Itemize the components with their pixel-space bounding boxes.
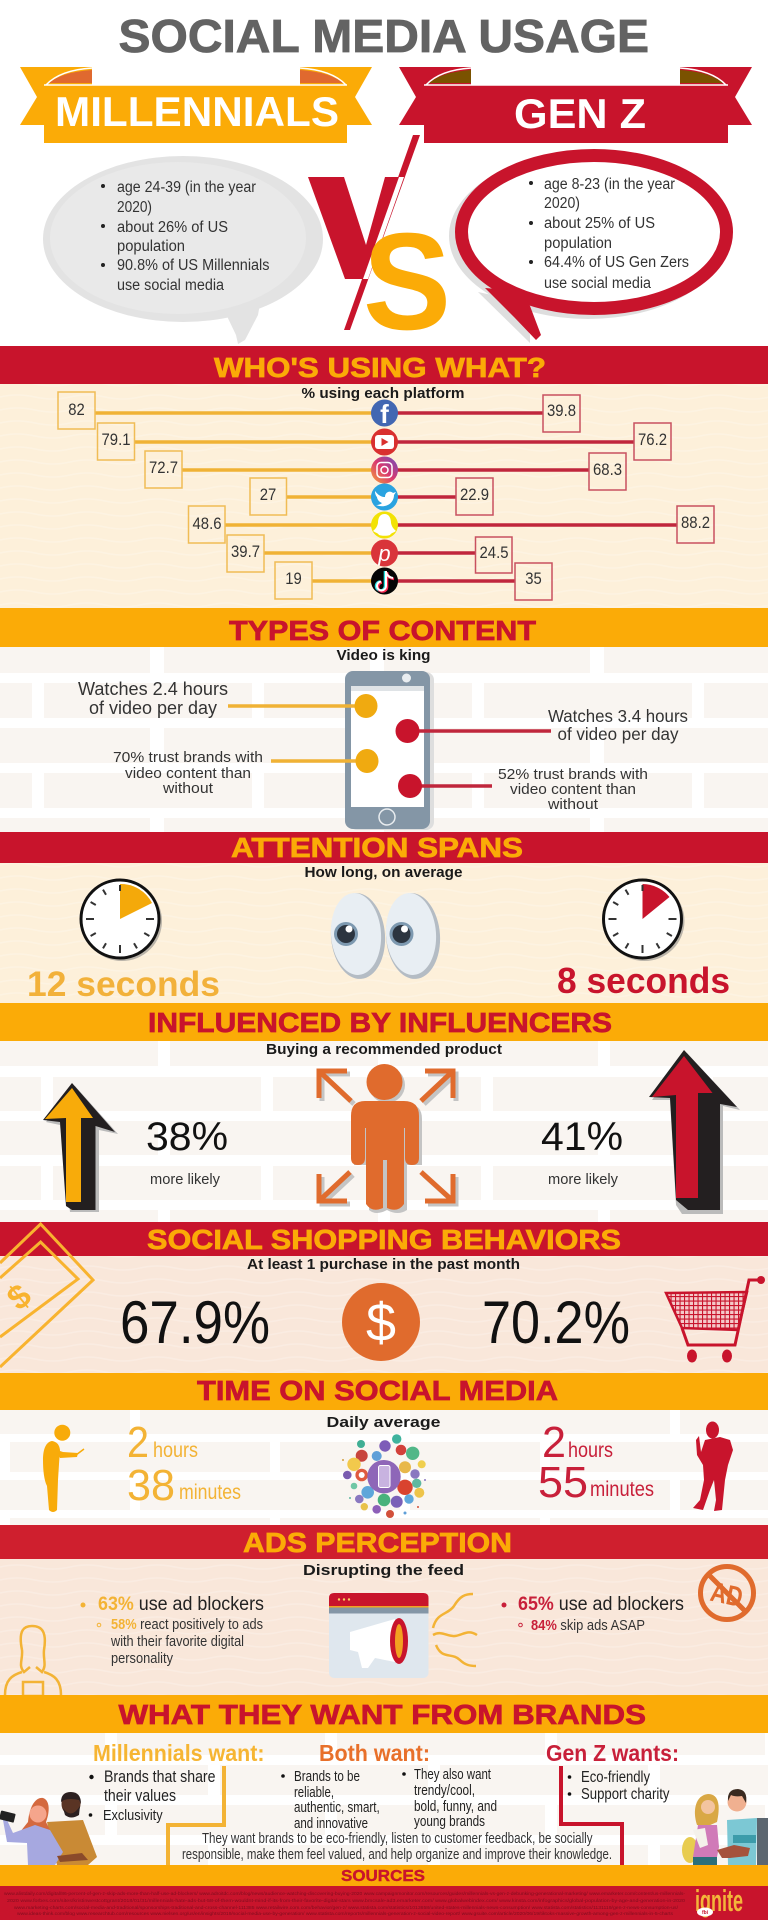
panel: social shopping behaviors: SOCIAL SHOPPING BEHAVIORS — [147, 1224, 621, 1255]
panel: influenced by influencers: Buying a recommended product — [266, 1042, 502, 1058]
Millennials ad facts: 58% react positively to ads — [111, 1617, 263, 1633]
Gen Z wants column: Gen Z wants: — [546, 1740, 679, 1766]
Millennials ad facts: with their favorite digital — [110, 1634, 244, 1650]
Millennials values — [58, 392, 312, 599]
callout: Millennials trust — [113, 749, 378, 797]
values text: 22.9 — [460, 486, 489, 504]
speech bubble: Millennials facts: use social media — [117, 277, 224, 294]
callout: Millennials video hours: Watches 2.4 hours — [78, 679, 228, 699]
logo: ignite: fbi — [702, 1910, 709, 1916]
icon: snapchat — [371, 512, 398, 538]
source links — [4, 1891, 686, 1916]
values text: 48.6 — [192, 515, 222, 533]
panel: who's using what: WHO'S USING WHAT? — [214, 352, 546, 383]
stat: 38% more likely: 38% — [146, 1115, 228, 1159]
icon: money bill — [0, 1224, 93, 1367]
source links: www.ideas-think.com/blog www.researchtub.com/resources www.nielsen.org/us/en/insights/2019/social-media-use-by-generation/ www.statista.com/reports/millennials-generation-z-social-video-report/ www.gsuite.com/article/2020/06/19/tiktoks-massive-growth-among-gen-z-millennials-in-5-charts — [17, 1911, 674, 1916]
values text: 88.2 — [681, 514, 710, 532]
values text — [68, 401, 710, 588]
values text: 79.1 — [102, 431, 130, 449]
callout: Gen Z video hours: of video per day — [558, 724, 679, 744]
stat: 8 seconds: 8 seconds — [557, 960, 730, 1001]
panel: what they want from brands — [0, 1695, 768, 1865]
panel: types of content — [0, 608, 768, 832]
icon: social media cluster — [342, 1434, 426, 1518]
panel: ads perception: ADS PERCEPTION — [243, 1527, 512, 1558]
values text: 72.7 — [149, 459, 178, 477]
speech bubble: Millennials facts: 2020) — [117, 199, 152, 216]
stat: Millennials 2 hours 38 minutes: 38 — [127, 1461, 175, 1510]
Millennials ad facts: personality — [111, 1651, 174, 1667]
panel: types of content: TYPES OF CONTENT — [229, 615, 536, 646]
Gen Z wants column — [546, 1740, 679, 1803]
stat: Gen Z 2 hours 55 minutes: 2 — [542, 1418, 566, 1467]
panel: attention spans: ATTENTION SPANS — [231, 832, 523, 863]
speech bubble: Millennials facts: population — [117, 238, 185, 255]
Both want column: bold, funny, and — [414, 1799, 497, 1815]
panel: types of content: Video is king — [336, 648, 430, 664]
VS emblem: S — [363, 205, 451, 359]
speech bubble: Millennials facts — [43, 156, 323, 344]
icon: pinterest: p — [377, 541, 391, 566]
icon: Millennial on phone — [43, 1425, 84, 1512]
speech bubble: Gen Z facts: 64.4% of US Gen Zers — [544, 254, 689, 271]
panel: social shopping behaviors: At least 1 purchase in the past month — [247, 1257, 520, 1273]
divider: Gen Z bracket — [561, 1766, 622, 1865]
Gen Z ad facts — [502, 1594, 684, 1634]
panel: time on social media: Daily average — [326, 1415, 440, 1431]
speech bubble: Gen Z facts: use social media — [544, 275, 651, 292]
icon: ad window with megaphone — [329, 1593, 477, 1678]
icon: dollar coin — [342, 1283, 420, 1361]
icon: no ads: AD — [708, 1576, 746, 1613]
Gen Z ad facts: 84% skip ads ASAP — [531, 1618, 645, 1634]
source links: www.marketing-charts.com/social-media-and-traditional/sponsorships-traditional-and-cross-channel-111385 www.retailwire.com.com/behavior/gen-z/ www.statista.com/statistics/1013658/united-states-millennials-news-consumption/ www.statista.com/statistics/1131119/gen-z-news-consumption-us/ — [14, 1905, 679, 1910]
stat: Gen Z 2 hours 55 minutes: hours — [568, 1439, 613, 1462]
Both want column: young brands — [414, 1814, 485, 1830]
callout: Gen Z video hours: Watches 3.4 hours — [548, 706, 688, 726]
stat: Gen Z 2 hours 55 minutes: 55 — [538, 1458, 588, 1507]
Both want column: They also want — [414, 1767, 491, 1783]
icon: twitter — [371, 484, 398, 510]
title: SOCIAL MEDIA USAGE — [118, 10, 649, 62]
speech bubble: Gen Z facts: age 8-23 (in the year — [544, 176, 675, 193]
summary text: They want brands to be eco-friendly, listen to customer feedback, be socially — [202, 1831, 593, 1847]
stat: 70.2%: 70.2% — [482, 1289, 630, 1356]
speech bubble: Millennials facts: 90.8% of US Millennials — [117, 257, 270, 274]
callout: Gen Z trust: without — [547, 796, 599, 813]
Both want column: Brands to be — [294, 1769, 360, 1785]
icon: Gen Z up arrow — [649, 1050, 740, 1214]
stat: Millennials 2 hours 38 minutes — [127, 1418, 241, 1510]
callout: Millennials video hours: of video per day — [89, 698, 217, 718]
panel: ads perception: Disrupting the feed — [303, 1563, 464, 1579]
stat: Millennials 2 hours 38 minutes: 2 — [127, 1418, 149, 1467]
callout: Gen Z trust: 52% trust brands with — [498, 766, 648, 783]
banner: Millennials: MILLENNIALS — [55, 88, 339, 135]
icon: phone — [345, 671, 434, 830]
source links: 2020 www.forbes.com/sites/kristinwestcottgrant/2018/01/31/millennials-hate-ads-but-58-of-them-wouldnt-mind-if-its-from-their-favorite-digital-stars www.bmcsale-ad3.emarketer.com/ www.globalwebindex.com/ www.kinsta.com/infographics/global-population-by-age-and-generation-in-2020 — [7, 1898, 686, 1903]
icon: Millennials clock — [81, 880, 162, 961]
Both want column: reliable, — [294, 1785, 334, 1801]
speech bubble: Gen Z facts: about 25% of US — [544, 215, 655, 232]
callout: Gen Z video hours — [396, 706, 688, 744]
icon: pinterest — [371, 540, 398, 566]
summary text: responsible, make them feel valued, and help organize and improve their knowledge. — [182, 1847, 612, 1863]
Gen Z wants column: Eco-friendly — [581, 1769, 650, 1786]
values text: 24.5 — [480, 544, 508, 562]
icon: eyes — [328, 891, 443, 981]
VS emblem — [308, 135, 451, 359]
callout: Millennials trust: video content than — [125, 765, 251, 782]
panel: ads perception — [0, 1525, 768, 1696]
panel: attention spans — [0, 832, 768, 1004]
panel: who's using what: % using each platform — [302, 386, 464, 402]
icon: woman outline — [5, 1626, 61, 1696]
Both want column: and innovative — [294, 1816, 368, 1832]
panel: who's using what — [0, 346, 768, 608]
values text: 39.7 — [231, 543, 260, 561]
panel: influenced by influencers — [0, 1003, 768, 1222]
stat: Gen Z 2 hours 55 minutes — [538, 1418, 654, 1507]
panel: influenced by influencers: INFLUENCED BY INFLUENCERS — [148, 1007, 612, 1038]
icon: no ads — [700, 1566, 754, 1620]
stat: 67.9%: 67.9% — [120, 1289, 270, 1356]
callout: Millennials trust: 70% trust brands with — [113, 749, 263, 766]
stat: 12 seconds: 12 seconds — [27, 965, 220, 1004]
values text: 68.3 — [593, 461, 622, 479]
Both want column: Both want: — [319, 1740, 430, 1766]
values text: 82 — [68, 401, 85, 419]
illustration: Gen Z students — [682, 1789, 768, 1865]
Both want column: authentic, smart, — [294, 1800, 380, 1816]
panel: sources: SOURCES — [341, 1868, 425, 1885]
panel: what they want from brands: WHAT THEY WANT FROM BRANDS — [118, 1699, 646, 1730]
logo: ignite — [695, 1883, 743, 1918]
icon: shopping cart — [666, 1276, 765, 1362]
icon: youtube — [371, 428, 398, 456]
icon: instagram — [371, 456, 398, 484]
stat: 38% more likely: more likely — [150, 1171, 220, 1188]
speech bubble: Gen Z facts: population — [544, 235, 612, 252]
Millennials want column: their values — [104, 1787, 176, 1805]
Gen Z wants column: Support charity — [581, 1786, 670, 1803]
panel: sources — [0, 1865, 768, 1920]
Millennials want column: Brands that share — [104, 1768, 216, 1786]
speech bubble: Millennials facts: about 26% of US — [117, 219, 228, 236]
Millennials want column — [89, 1740, 264, 1824]
callout: Gen Z trust — [398, 766, 648, 813]
banner: Millennials — [20, 67, 372, 143]
banner: Gen Z — [399, 67, 752, 143]
panel: attention spans: How long, on average — [304, 865, 462, 881]
Millennials want column: Millennials want: — [93, 1740, 264, 1766]
icon: influencer figure — [319, 1064, 456, 1213]
stat: 41% more likely: more likely — [548, 1171, 618, 1188]
Gen Z ad facts: 65% use ad blockers — [518, 1594, 684, 1615]
icon: facebook: f — [380, 399, 389, 429]
icon: Gen Z on phone — [693, 1422, 733, 1511]
stat: Millennials 2 hours 38 minutes: minutes — [179, 1481, 241, 1504]
icon: tiktok — [371, 568, 398, 594]
speech bubble: Gen Z facts: 2020) — [544, 195, 580, 212]
callout: Millennials video hours — [78, 679, 378, 718]
icon: Millennials up arrow — [43, 1083, 118, 1212]
icon: facebook — [371, 399, 398, 429]
Both want column — [281, 1740, 497, 1832]
stat: 38% more likely — [146, 1115, 228, 1188]
values text: 35 — [525, 570, 542, 588]
banner: Gen Z: GEN Z — [514, 90, 646, 137]
values text: 27 — [260, 486, 276, 504]
panel: social shopping behaviors — [0, 1222, 768, 1373]
speech bubble: Gen Z facts — [449, 153, 727, 343]
stat: 41% more likely — [541, 1115, 623, 1188]
panel: time on social media — [0, 1373, 768, 1525]
icon: dollar coin: $ — [366, 1293, 396, 1353]
values text: 19 — [285, 570, 302, 588]
panel: time on social media: TIME ON SOCIAL MEDIA — [197, 1375, 558, 1406]
divider: Millennials bracket — [168, 1766, 224, 1865]
Gen Z values — [456, 395, 714, 600]
Millennials ad facts — [80, 1594, 264, 1667]
values text: 39.8 — [547, 402, 576, 420]
Millennials ad facts: 63% use ad blockers — [98, 1594, 264, 1615]
callout: Millennials trust: without — [162, 780, 214, 797]
illustration: Millennial couple — [0, 1792, 97, 1865]
Millennials want column: Exclusivity — [103, 1807, 163, 1824]
callout: Gen Z trust: video content than — [510, 781, 636, 798]
summary text — [182, 1831, 612, 1863]
icon: Gen Z clock — [604, 880, 684, 961]
stat: Gen Z 2 hours 55 minutes: minutes — [590, 1478, 654, 1501]
values text: 76.2 — [638, 431, 667, 449]
speech bubble: Millennials facts: age 24-39 (in the year — [117, 179, 256, 196]
source links: www.alistdaily.com/digital/86-percent-of-gen-z-skip-ads-more-than-half-use-ad-blockers/ www.adroitdc.com/blog/news/audience-watching-discovering-buying-2020 www.campaignmonitor.com/resources/guides/millennials-vs-gen-z-debunking-generational-marketing/ www.emarketer.com/content/us-millennials- — [4, 1891, 686, 1896]
icon: money bill: $ — [0, 1277, 39, 1318]
stat: Millennials 2 hours 38 minutes: hours — [153, 1439, 198, 1462]
connector lines — [95, 413, 677, 581]
Both want column: trendy/cool, — [414, 1783, 475, 1799]
stat: 41% more likely: 41% — [541, 1115, 623, 1159]
